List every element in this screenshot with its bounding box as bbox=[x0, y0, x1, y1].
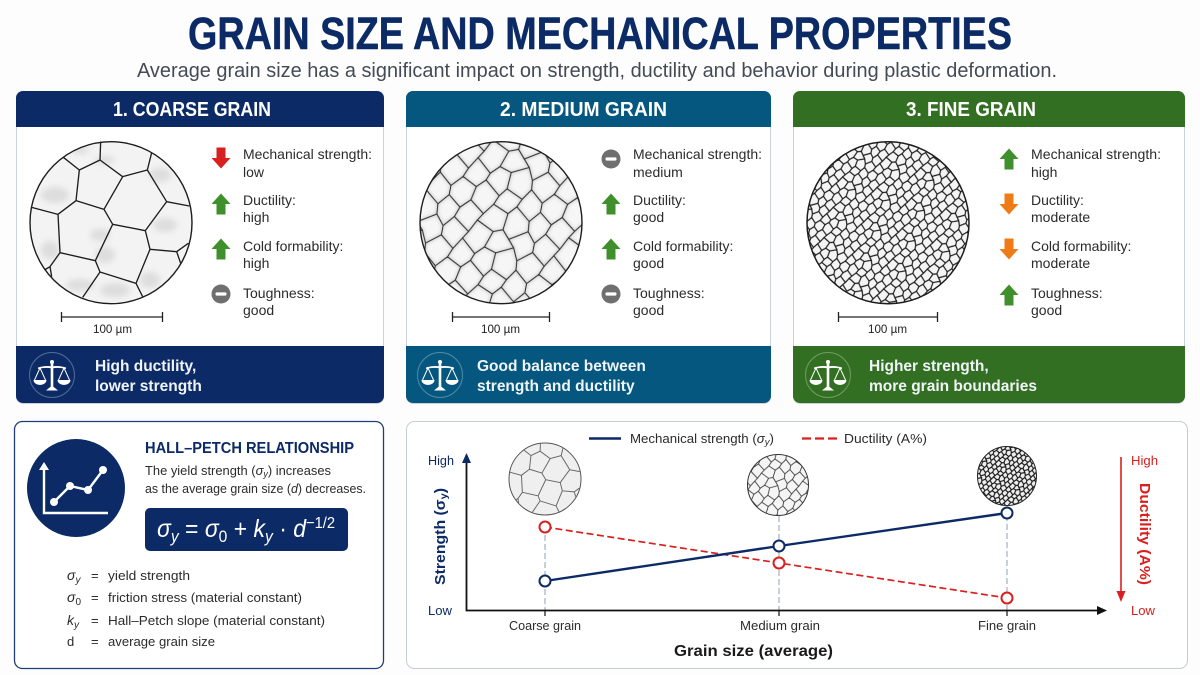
footer: coarse: High ductility, bbox=[95, 358, 196, 375]
formula: = bbox=[179, 515, 205, 543]
properties: coarse: Ductility: bbox=[243, 192, 296, 208]
properties: coarse: low bbox=[243, 164, 265, 180]
right axis: ductility: High bbox=[1131, 454, 1158, 468]
scale bar: coarse: 100 µm bbox=[93, 322, 132, 336]
properties: medium: Ductility: bbox=[633, 192, 686, 208]
properties: fine: Toughness: bbox=[1031, 285, 1103, 301]
icon: balance scales bbox=[30, 352, 74, 398]
icon: balance scales bbox=[806, 352, 850, 398]
grain thumbnail: medium bbox=[748, 454, 808, 516]
properties: medium: Toughness: bbox=[633, 285, 705, 301]
properties: coarse: high bbox=[243, 255, 269, 271]
grain thumbnail: fine bbox=[978, 446, 1036, 506]
properties: coarse: Mechanical strength: bbox=[243, 146, 372, 162]
footer: fine: Higher strength, bbox=[869, 358, 989, 375]
footer: fine bbox=[793, 346, 1185, 403]
properties: coarse: Toughness: bbox=[243, 285, 315, 301]
symbol legend: σ bbox=[67, 567, 75, 583]
symbol legend: y bbox=[74, 575, 81, 586]
icon: chart badge bbox=[27, 439, 125, 537]
chart legend: Ductility (A%) bbox=[844, 432, 927, 446]
ductility line bbox=[540, 522, 1012, 604]
properties: medium: good bbox=[633, 209, 664, 225]
symbol legend: 0 bbox=[75, 597, 81, 608]
description: ) increases bbox=[268, 463, 331, 478]
properties: fine: moderate bbox=[1031, 209, 1090, 225]
micrograph: coarse grain bbox=[30, 142, 192, 304]
formula: y bbox=[170, 527, 180, 546]
symbol legend: d bbox=[67, 634, 74, 649]
left axis labels: Low bbox=[428, 604, 453, 618]
icon: green up arrow bbox=[212, 194, 230, 214]
formula bbox=[145, 508, 348, 551]
grain thumbnail: coarse bbox=[509, 443, 581, 515]
x-axis labels bbox=[509, 619, 1036, 633]
axes bbox=[462, 453, 1107, 616]
description bbox=[145, 463, 366, 496]
formula: σ bbox=[157, 515, 172, 543]
scale bar: medium: 100 µm bbox=[481, 322, 520, 336]
footer: fine: more grain boundaries bbox=[869, 378, 1037, 395]
symbol legend bbox=[67, 567, 325, 649]
symbol legend: k bbox=[67, 612, 74, 628]
properties: medium: Mechanical strength: bbox=[633, 146, 762, 162]
description: as the average grain size (d) decreases. bbox=[145, 481, 366, 496]
properties: fine: Mechanical strength: bbox=[1031, 146, 1161, 162]
symbol legend: = bbox=[91, 568, 99, 583]
formula: d bbox=[293, 515, 307, 543]
header: medium grain: 2. MEDIUM GRAIN bbox=[500, 99, 667, 121]
properties: fine: Ductility: bbox=[1031, 192, 1084, 208]
scale bar: medium bbox=[452, 312, 550, 336]
properties: medium: Cold formability: bbox=[633, 238, 733, 254]
properties: medium bbox=[602, 146, 762, 318]
description: The yield strength (σ bbox=[145, 463, 263, 478]
properties: medium: medium bbox=[633, 164, 683, 180]
footer: medium: Good balance between bbox=[477, 358, 646, 375]
left axis labels bbox=[428, 454, 454, 618]
icon: orange down arrow bbox=[1000, 238, 1018, 260]
icon: green up arrow bbox=[212, 238, 230, 260]
symbol legend: Hall–Petch slope (material constant) bbox=[108, 613, 325, 628]
symbol legend: = bbox=[91, 590, 99, 605]
formula: 0 bbox=[219, 527, 227, 546]
title: GRAIN SIZE AND MECHANICAL PROPERTIES bbox=[188, 8, 1012, 59]
symbol legend: σ bbox=[67, 589, 75, 605]
scale bar: coarse bbox=[62, 312, 162, 336]
panel: Hall-Petch relationship bbox=[14, 422, 384, 668]
properties: medium: good bbox=[633, 255, 664, 271]
footer: medium: strength and ductility bbox=[477, 378, 635, 395]
symbol legend: average grain size bbox=[108, 634, 215, 649]
scale bar: fine bbox=[838, 312, 938, 336]
panel: chart bbox=[406, 422, 1188, 668]
formula: −1/2 bbox=[306, 515, 335, 532]
left axis labels: y bbox=[439, 493, 450, 499]
panel: medium grain bbox=[406, 91, 771, 404]
micrograph: medium grain bbox=[420, 141, 582, 305]
icon: orange down arrow bbox=[1000, 194, 1018, 214]
icon: green up arrow bbox=[602, 238, 620, 260]
icon: green up arrow bbox=[1000, 148, 1018, 170]
strength line bbox=[540, 508, 1012, 586]
properties: medium: good bbox=[633, 302, 664, 318]
symbol legend: friction stress (material constant) bbox=[108, 590, 302, 605]
chart legend: ) bbox=[770, 432, 774, 446]
guide lines bbox=[545, 506, 1007, 616]
symbol legend: = bbox=[91, 613, 99, 628]
footer: coarse bbox=[16, 346, 384, 403]
formula: + bbox=[227, 515, 254, 543]
left axis labels: Strength (σ bbox=[433, 507, 449, 585]
properties: fine: high bbox=[1031, 164, 1057, 180]
right axis: ductility bbox=[1116, 454, 1158, 618]
formula: y bbox=[264, 527, 274, 546]
symbol legend: y bbox=[73, 620, 80, 631]
panel: fine grain bbox=[793, 91, 1185, 404]
header: coarse grain: 1. COARSE GRAIN bbox=[113, 99, 271, 121]
icon: red down arrow bbox=[212, 148, 230, 168]
symbol legend: = bbox=[91, 634, 99, 649]
subtitle: Average grain size has a significant impact on strength, ductility and behavior during plastic deformation. bbox=[137, 60, 1057, 82]
chart legend: Mechanical strength ( σ bbox=[630, 432, 764, 446]
properties: fine: good bbox=[1031, 302, 1062, 318]
panel: coarse grain bbox=[16, 91, 384, 404]
right axis: ductility: Ductility (A%) bbox=[1136, 483, 1152, 585]
right axis: ductility: Low bbox=[1131, 604, 1156, 618]
x-axis title: Grain size (average) bbox=[674, 643, 833, 660]
footer: coarse: lower strength bbox=[95, 378, 202, 395]
chart legend bbox=[589, 432, 927, 447]
icon: green up arrow bbox=[1000, 284, 1018, 306]
header: fine grain: 3. FINE GRAIN bbox=[906, 99, 1036, 121]
icon: neutral bbox=[212, 284, 230, 304]
symbol legend: yield strength bbox=[108, 568, 190, 583]
left axis labels: ) bbox=[433, 488, 449, 493]
properties: coarse: good bbox=[243, 302, 274, 318]
header: coarse grain bbox=[16, 91, 384, 127]
icon: neutral bbox=[602, 150, 620, 168]
chart legend: y bbox=[764, 437, 770, 447]
icon: neutral bbox=[602, 284, 620, 304]
left axis labels: High bbox=[428, 454, 454, 468]
footer: medium bbox=[406, 346, 771, 403]
properties: coarse: Cold formability: bbox=[243, 238, 343, 254]
x-axis labels: Medium grain bbox=[740, 619, 820, 633]
heading: HALL–PETCH RELATIONSHIP bbox=[145, 440, 354, 457]
properties: fine bbox=[1000, 146, 1161, 318]
x-axis labels: Fine grain bbox=[978, 619, 1036, 633]
x-axis labels: Coarse grain bbox=[509, 619, 581, 633]
header: fine grain bbox=[793, 91, 1185, 127]
micrograph: fine grain bbox=[807, 141, 969, 305]
properties: coarse: high bbox=[243, 209, 269, 225]
icon: green up arrow bbox=[602, 194, 620, 214]
properties: fine: Cold formability: bbox=[1031, 238, 1131, 254]
description: y bbox=[262, 469, 268, 479]
properties: fine: moderate bbox=[1031, 255, 1090, 271]
formula: k bbox=[254, 515, 266, 543]
scale bar: fine: 100 µm bbox=[868, 322, 907, 336]
header: medium grain bbox=[406, 91, 771, 127]
formula: · bbox=[273, 515, 293, 543]
icon: balance scales bbox=[418, 352, 462, 398]
properties: coarse bbox=[212, 146, 372, 318]
formula: σ bbox=[205, 515, 220, 543]
